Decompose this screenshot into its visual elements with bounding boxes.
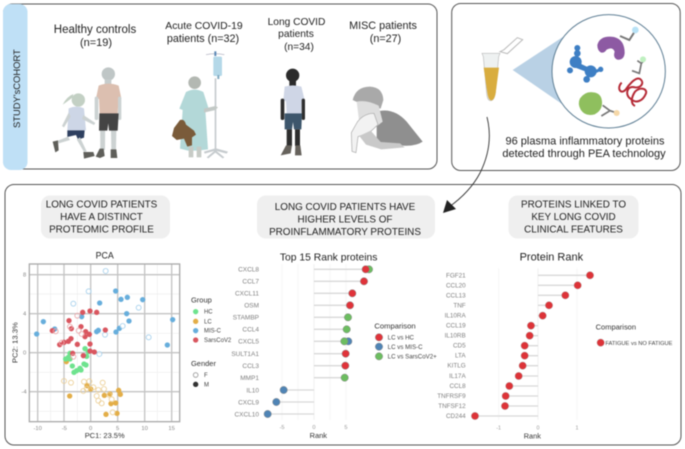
chart: PCA scatter: 4 xyxy=(23,312,27,318)
panel: PEA technology xyxy=(452,4,680,170)
heading: clinical features xyxy=(508,196,638,238)
chart: top 15 rank proteins: STAMBP xyxy=(233,315,259,322)
heading: distinct proteomic profile: HAVE A DISTINCT xyxy=(60,212,143,223)
legend: PCA group and gender: LC xyxy=(204,319,212,325)
chart: protein rank: KITLG xyxy=(447,363,466,370)
icon: blue molecule xyxy=(567,45,603,83)
magnified circle xyxy=(552,15,665,128)
chart: PCA scatter: PC2: 13.3% xyxy=(10,322,19,363)
chart: PCA scatter: 10 xyxy=(141,426,149,432)
heading: higher levels: HIGHER LEVELS OF xyxy=(298,214,392,226)
chart: protein rank: IL10RB xyxy=(445,333,466,340)
chart: top 15 rank proteins: Rank xyxy=(310,431,327,440)
chart: PCA scatter: -4 xyxy=(21,390,27,396)
chart: top 15 rank proteins: 5 xyxy=(344,425,348,431)
chart: protein rank: CD5 xyxy=(453,343,466,350)
heading: distinct proteomic profile: LONG COVID PATIENTS xyxy=(46,200,158,210)
panel: study cohort xyxy=(3,4,437,170)
legend: comparison for top 15: LC vs HC xyxy=(388,334,415,341)
HC points xyxy=(63,346,91,375)
panel: results xyxy=(5,184,681,445)
legend: fatigue comparison: Comparison xyxy=(596,323,636,332)
cohort: MISC patients: MISC patients xyxy=(349,20,418,32)
chart: top 15 rank proteins: SULT1A1 xyxy=(231,351,259,358)
chart: protein rank: TNF xyxy=(453,302,466,309)
cohort: healthy controls: (n=19) xyxy=(80,37,112,49)
chart: protein rank: 1 xyxy=(576,426,579,432)
chart: top 15 rank proteins: CXCL8 xyxy=(238,267,259,274)
cohort: long COVID patients: patients xyxy=(278,29,314,40)
legend: PCA group and gender: M xyxy=(204,382,209,388)
chart: top 15 rank proteins: CCL4 xyxy=(242,327,259,334)
chart: protein rank: TNFSF12 xyxy=(438,403,466,410)
cohort: acute COVID-19 patients: patients (n=32) xyxy=(167,33,239,45)
legend: PCA group and gender: MIS-C xyxy=(204,329,222,335)
legend: PCA group and gender xyxy=(191,296,232,388)
cohort: healthy controls xyxy=(53,24,136,159)
cohort: long COVID patients: Long COVID xyxy=(268,17,325,28)
legend: fatigue comparison: FATIGUE vs NO FATIGUE xyxy=(605,341,673,347)
chart: protein rank: IL10RA xyxy=(445,313,466,320)
caption: PEA technology: 96 plasma inflammatory proteins xyxy=(506,136,665,148)
chart: top 15 rank proteins: 0 xyxy=(312,425,316,431)
chart: protein rank xyxy=(437,252,594,441)
chart: top 15 rank proteins: Top 15 Rank proteins xyxy=(280,253,377,264)
cohort: healthy controls: Healthy controls xyxy=(54,24,136,36)
chart: PCA scatter: 5 xyxy=(116,426,119,432)
chart: PCA scatter: PCA xyxy=(96,250,114,260)
cohort: long COVID patients xyxy=(268,17,325,155)
chart: top 15 rank proteins: CXCL11 xyxy=(235,291,259,298)
heading: clinical features: CLINICAL FEATURES xyxy=(524,224,623,236)
chart: top 15 rank proteins: -5 xyxy=(279,425,285,431)
icon: green antibody xyxy=(632,56,646,73)
chart: protein rank: 0 xyxy=(537,426,540,432)
heading: higher levels: PROINFLAMMATORY PROTEINS xyxy=(269,227,421,238)
cohort side tab xyxy=(3,4,28,170)
chart: protein rank: Protein Rank xyxy=(520,252,584,264)
chart: protein rank: CD244 xyxy=(446,413,466,420)
legend: PCA group and gender: HC xyxy=(204,310,213,316)
heading: higher levels: LONG COVID PATIENTS HAVE xyxy=(275,202,416,213)
chart: PCA scatter: 0 xyxy=(89,426,93,432)
chart: protein rank: IL17A xyxy=(449,373,466,380)
chart: top 15 rank proteins: CCL3 xyxy=(242,363,259,370)
chart: top 15 rank proteins: CXCL5 xyxy=(238,339,259,346)
caption: PEA technology: detected through PEA technology xyxy=(502,148,666,160)
legend: PCA group and gender: F xyxy=(204,373,208,379)
chart: protein rank: FGF21 xyxy=(446,272,466,279)
icon: sample tube xyxy=(482,38,523,101)
cohort: long COVID patients: (n=34) xyxy=(284,42,314,53)
heading: distinct proteomic profile xyxy=(41,196,170,238)
chart: PCA scatter: -5 xyxy=(62,426,67,432)
LC points xyxy=(61,359,123,417)
legend: comparison for top 15: LC vs MIS-C xyxy=(388,344,423,351)
cohort: MISC patients: (n=27) xyxy=(370,33,401,45)
heading: higher levels xyxy=(257,196,435,238)
cohort: acute COVID-19 patients xyxy=(165,21,243,158)
caption: PEA technology xyxy=(502,136,666,160)
chart: PCA scatter: 0 xyxy=(23,351,27,357)
chart: protein rank: CCL8 xyxy=(449,383,466,390)
chart: protein rank: LTA xyxy=(455,353,466,360)
chart: PCA scatter: PC1: 23.5% xyxy=(85,431,125,440)
chart: protein rank: TNFRSF9 xyxy=(437,393,466,400)
chart: protein rank: CCL20 xyxy=(446,282,466,289)
cohort: MISC patients xyxy=(349,20,423,153)
legend: comparison for top 15: LC vs SarsCoV2+ xyxy=(388,353,437,360)
legend: comparison for top 15: Comparison xyxy=(374,321,416,330)
chart: protein rank: CCL13 xyxy=(446,292,466,299)
chart: protein rank: CCL19 xyxy=(446,323,466,330)
heading: clinical features: KEY LONG COVID xyxy=(531,212,616,223)
heading: distinct proteomic profile: PROTEOMIC PROFILE xyxy=(49,224,154,236)
chart: PCA scatter: 8 xyxy=(23,273,26,279)
chart: top 15 rank proteins: MMP1 xyxy=(240,375,259,382)
chart: top 15 rank proteins xyxy=(231,253,377,440)
icon: red coiled protein xyxy=(619,79,646,106)
chart: PCA scatter: 15 xyxy=(168,426,175,432)
MIS-C points xyxy=(34,268,175,356)
chart: top 15 rank proteins: IL10 xyxy=(246,387,259,394)
chart: protein rank: -1 xyxy=(496,426,501,432)
cohort side tab: STUDY'sCOHORT xyxy=(11,49,22,128)
heading: clinical features: PROTEINS LINKED TO xyxy=(521,200,626,210)
chart: top 15 rank proteins: CXCL10 xyxy=(234,411,259,418)
chart: PCA scatter xyxy=(10,250,180,440)
legend: fatigue comparison xyxy=(596,323,673,347)
chart: top 15 rank proteins: OSM xyxy=(244,303,259,310)
legend: PCA group and gender: SarsCoV2 xyxy=(204,338,232,344)
arrow: from PEA to results xyxy=(443,117,489,213)
SarsCoV2 points xyxy=(50,308,108,359)
chart: PCA scatter: -10 xyxy=(33,426,43,432)
legend: PCA group and gender: Group xyxy=(191,296,212,305)
magnification cone xyxy=(513,33,568,108)
chart: protein rank: Rank xyxy=(524,432,541,441)
chart: top 15 rank proteins: CXCL9 xyxy=(238,399,259,406)
icon: purple protein with antibody xyxy=(597,27,639,60)
icon: green protein with antibody xyxy=(579,92,620,116)
cohort: acute COVID-19 patients: Acute COVID-19 xyxy=(165,21,243,32)
chart: top 15 rank proteins: CCL7 xyxy=(242,279,259,286)
legend: PCA group and gender: Gender xyxy=(191,359,216,368)
legend: comparison for top 15 xyxy=(374,321,437,360)
